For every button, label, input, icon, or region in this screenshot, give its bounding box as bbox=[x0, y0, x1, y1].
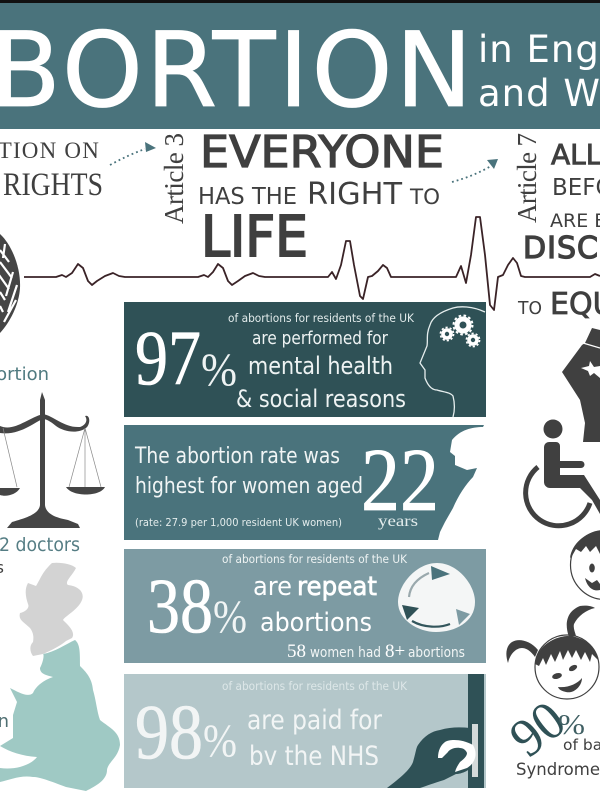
article 3 label: Article 3 bbox=[159, 133, 189, 224]
panel: 98 percent: are paid for bbox=[247, 705, 382, 736]
panel: 22 years: (rate: 27.9 per 1,000 resident UK women) bbox=[135, 516, 342, 529]
panel: 98 percent: of abortions for residents of the UK bbox=[222, 679, 407, 693]
heading: convention on human rights bbox=[0, 138, 103, 203]
panel: 38 percent: women had bbox=[310, 645, 381, 661]
panel: 97 percent: of abortions for residents of the UK bbox=[228, 311, 414, 325]
panel: 38 percent: 8+ bbox=[385, 641, 405, 662]
icon: boy face bbox=[570, 530, 600, 600]
panel: 38 percent: % bbox=[213, 591, 247, 643]
icon: hand paying bbox=[387, 674, 484, 788]
map: england and wales bbox=[0, 640, 120, 791]
subtitle: in England and Wales bbox=[478, 28, 600, 115]
panel: 38 percent: abortions bbox=[260, 608, 372, 638]
arrow: to article 3 bbox=[110, 142, 156, 165]
text: two doctors: 2 doctors bbox=[0, 534, 80, 556]
arrow: to article 7 bbox=[452, 159, 498, 182]
panel: 98 percent: % bbox=[203, 715, 237, 767]
stat: 90 percent: 90 bbox=[498, 689, 576, 768]
panel: 97 percent: 97 bbox=[135, 314, 201, 401]
panel: 98 percent: by the NHS bbox=[249, 741, 379, 772]
heading: convention on human rights: RIGHTS bbox=[3, 167, 103, 203]
panel: 97 percent: mental health bbox=[248, 352, 393, 380]
icon: girl face bbox=[506, 606, 599, 699]
panel: 22 years: 22 bbox=[361, 431, 439, 530]
article 3 statement: LIFE bbox=[201, 205, 308, 270]
article 7 statement: TO bbox=[517, 298, 542, 319]
article 7 statement: ALL bbox=[551, 138, 600, 171]
panel: 38 percent: 58 bbox=[287, 641, 306, 662]
panel: 38 percent: 38 bbox=[147, 562, 213, 649]
icon: raised fist bbox=[562, 328, 600, 442]
panel: 38 percent: repeat bbox=[297, 572, 377, 602]
article 3 statement bbox=[198, 127, 444, 270]
header banner bbox=[0, 0, 600, 131]
panel: 22 years: highest for women aged bbox=[135, 474, 363, 499]
article 7 statement bbox=[517, 138, 600, 322]
icon: scales of justice bbox=[0, 392, 105, 528]
icon: laurel wreath bbox=[0, 234, 20, 333]
icon: head with gears bbox=[420, 307, 485, 417]
stat: 90 percent bbox=[498, 689, 600, 780]
heartbeat line bbox=[24, 217, 600, 310]
icon: repeat cycle bbox=[398, 563, 475, 632]
panel: 98 percent: 98 bbox=[135, 688, 203, 775]
icon: wheelchair bbox=[526, 420, 600, 526]
panel: 97 percent: % bbox=[201, 344, 237, 396]
stat: 90 percent: % bbox=[558, 709, 585, 741]
text: two doctors bbox=[0, 534, 80, 577]
panel: 38 percent: of abortions for residents of the UK bbox=[222, 552, 407, 566]
article 7 label: Article 7 bbox=[512, 133, 542, 223]
article 3 statement: EVERYONE bbox=[200, 127, 444, 178]
article 3 statement: TO bbox=[409, 185, 440, 209]
panel: 97 percent: & social reasons bbox=[236, 385, 406, 413]
article 3 statement: HAS THE bbox=[198, 184, 297, 210]
panel: 98 percent bbox=[124, 674, 486, 788]
map: scotland bbox=[20, 563, 83, 656]
panel: 97 percent bbox=[124, 302, 486, 417]
stat: 90 percent: Syndrome bbox=[516, 760, 600, 780]
panel: 22 years: The abortion rate was bbox=[134, 444, 340, 469]
panel: 38 percent: abortions bbox=[408, 645, 465, 661]
panel: 22 years: years bbox=[378, 513, 418, 530]
panel: 38 percent: are bbox=[253, 572, 292, 602]
panel: 97 percent: are performed for bbox=[252, 329, 389, 349]
article 3 statement: RIGHT bbox=[307, 177, 403, 212]
panel: 38 percent bbox=[124, 549, 486, 663]
panel: 22 years bbox=[124, 425, 484, 540]
